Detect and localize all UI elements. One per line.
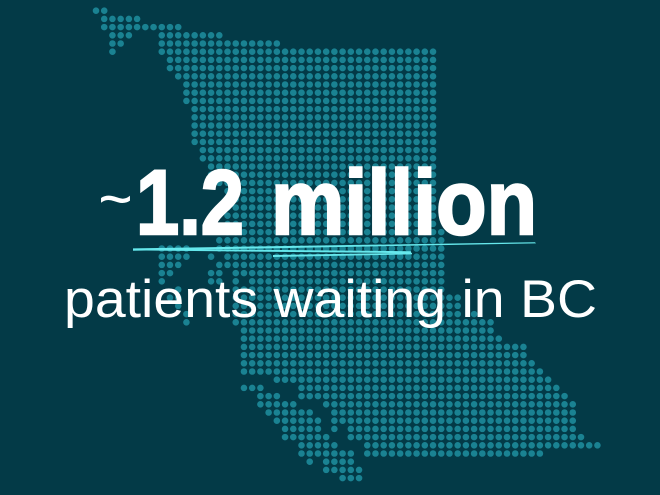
headline number: 1.2 [136,152,244,254]
hand-drawn underline [133,242,536,257]
headline unit: million [271,152,537,254]
dot map of British Columbia [96,11,598,478]
subheading: patients waiting in BC [64,270,597,329]
tilde: ~ [99,171,132,227]
